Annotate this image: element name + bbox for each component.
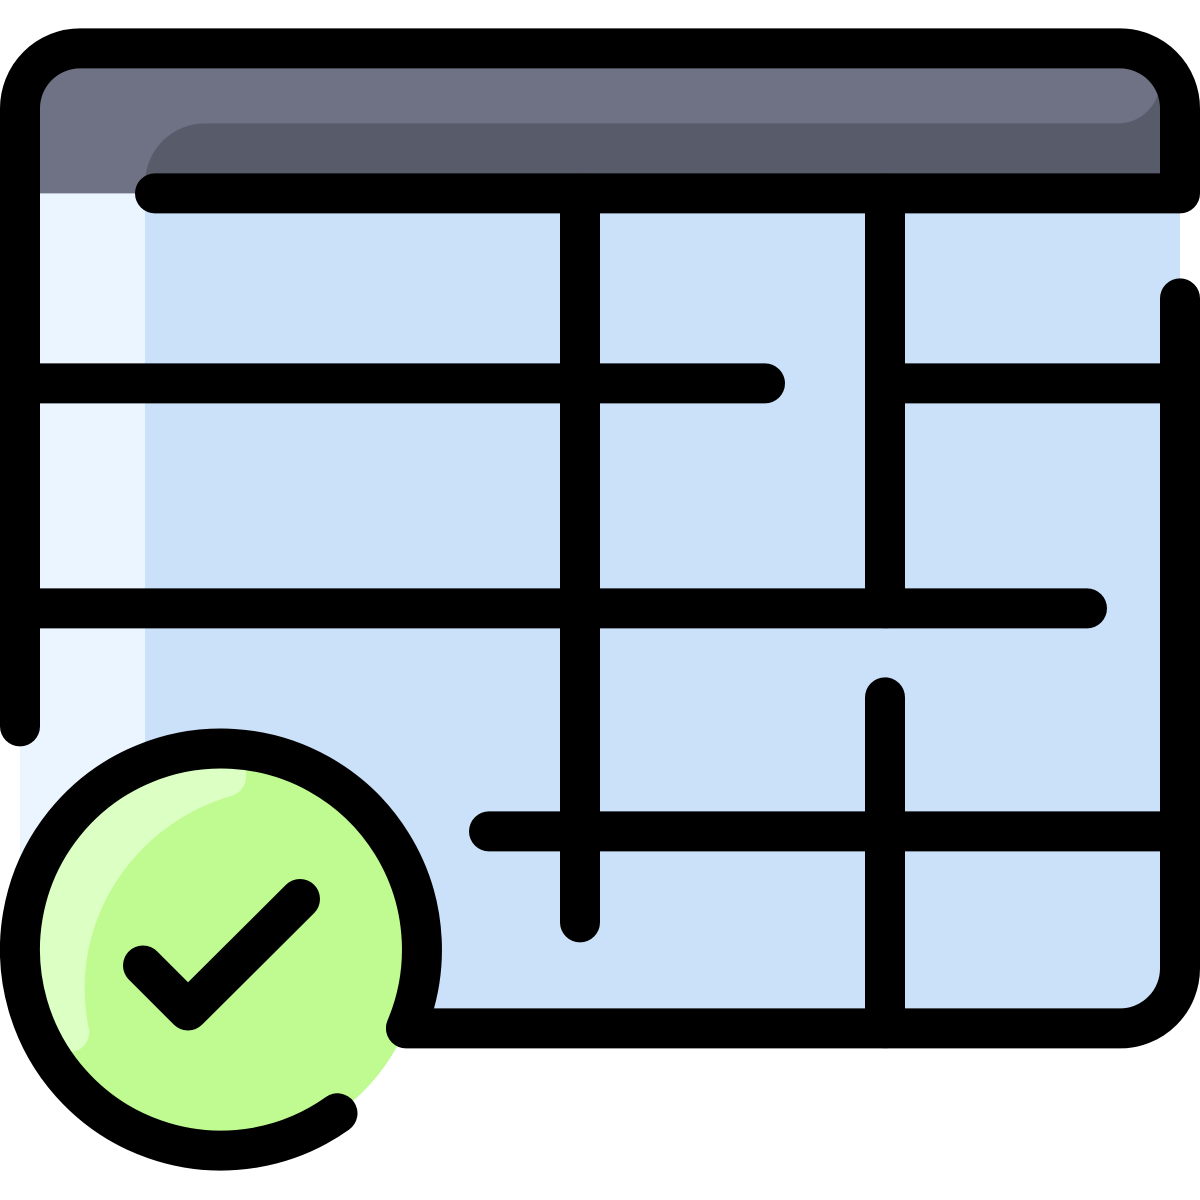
icon: check mark (143, 899, 300, 1010)
table header bar (20, 48, 1180, 193)
table outline and grid lines (20, 48, 1180, 1028)
check badge fill (20, 748, 422, 1150)
table body fill (20, 193, 1180, 1028)
check badge outline (20, 749, 422, 1151)
